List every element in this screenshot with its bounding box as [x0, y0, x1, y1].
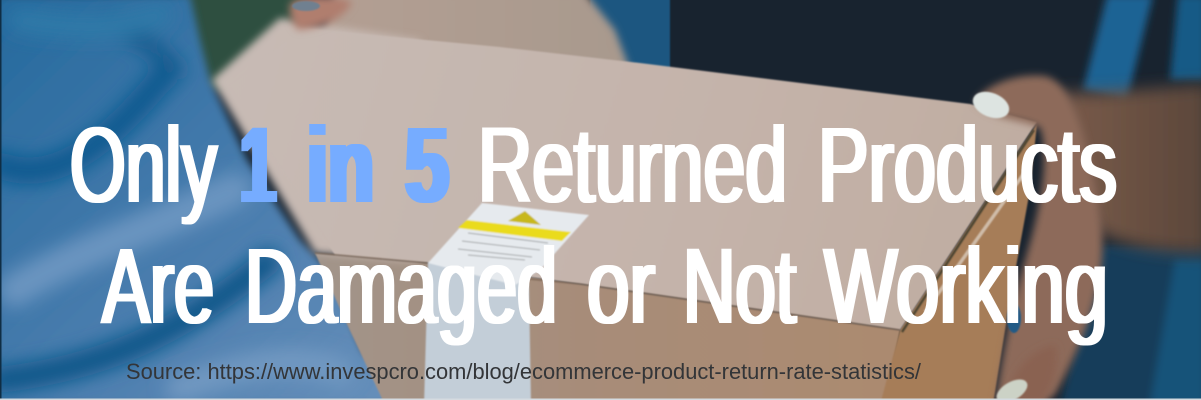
label fine print — [458, 233, 548, 260]
warning triangle — [508, 211, 541, 225]
label sheet — [428, 203, 589, 285]
title line 2: Are — [102, 225, 214, 346]
box front face — [315, 253, 900, 400]
highlighted statistic — [240, 104, 449, 225]
box flap gap — [902, 130, 1034, 332]
box top face — [228, 28, 1037, 330]
title line 1 — [70, 104, 1117, 225]
title line 2: or — [587, 225, 655, 346]
highlighted statistic: 1 — [240, 104, 276, 225]
highlighted statistic: 5 — [405, 104, 449, 225]
warning label and tape — [424, 203, 589, 400]
blue sleeve right — [1060, 0, 1201, 400]
title line 2 — [102, 225, 1108, 346]
palm and fingers — [975, 76, 1103, 400]
source citation: Source: https://www.invespcro.com/blog/ecommerce-product-return-rate-statistics/ — [126, 359, 922, 384]
left hand at top of box — [290, 0, 352, 30]
highlighted statistic: in — [307, 104, 374, 225]
fingernails — [969, 87, 1013, 123]
forearm — [1060, 84, 1201, 253]
forearm above box — [320, 0, 630, 70]
lower finger — [1005, 345, 1057, 400]
title line 1: Only — [70, 104, 217, 225]
title line 1: Returned — [478, 104, 787, 225]
green background patch — [175, 0, 305, 90]
blue gap between fingers — [1007, 303, 1021, 333]
blue band above box — [590, 0, 670, 70]
cardboard box — [212, 18, 1037, 400]
title line 2: Damaged — [245, 225, 557, 346]
bottom edge strip — [0, 398, 1201, 400]
title — [70, 104, 1117, 346]
title line 2: Not — [683, 225, 796, 346]
yellow stripe — [458, 220, 571, 241]
tape strip — [424, 262, 531, 400]
box fold shadow — [315, 253, 900, 330]
right hand holding box — [975, 76, 1201, 400]
blue sleeve left — [0, 0, 420, 400]
box right face — [880, 124, 1037, 400]
blurred left edge of box top — [212, 18, 420, 262]
